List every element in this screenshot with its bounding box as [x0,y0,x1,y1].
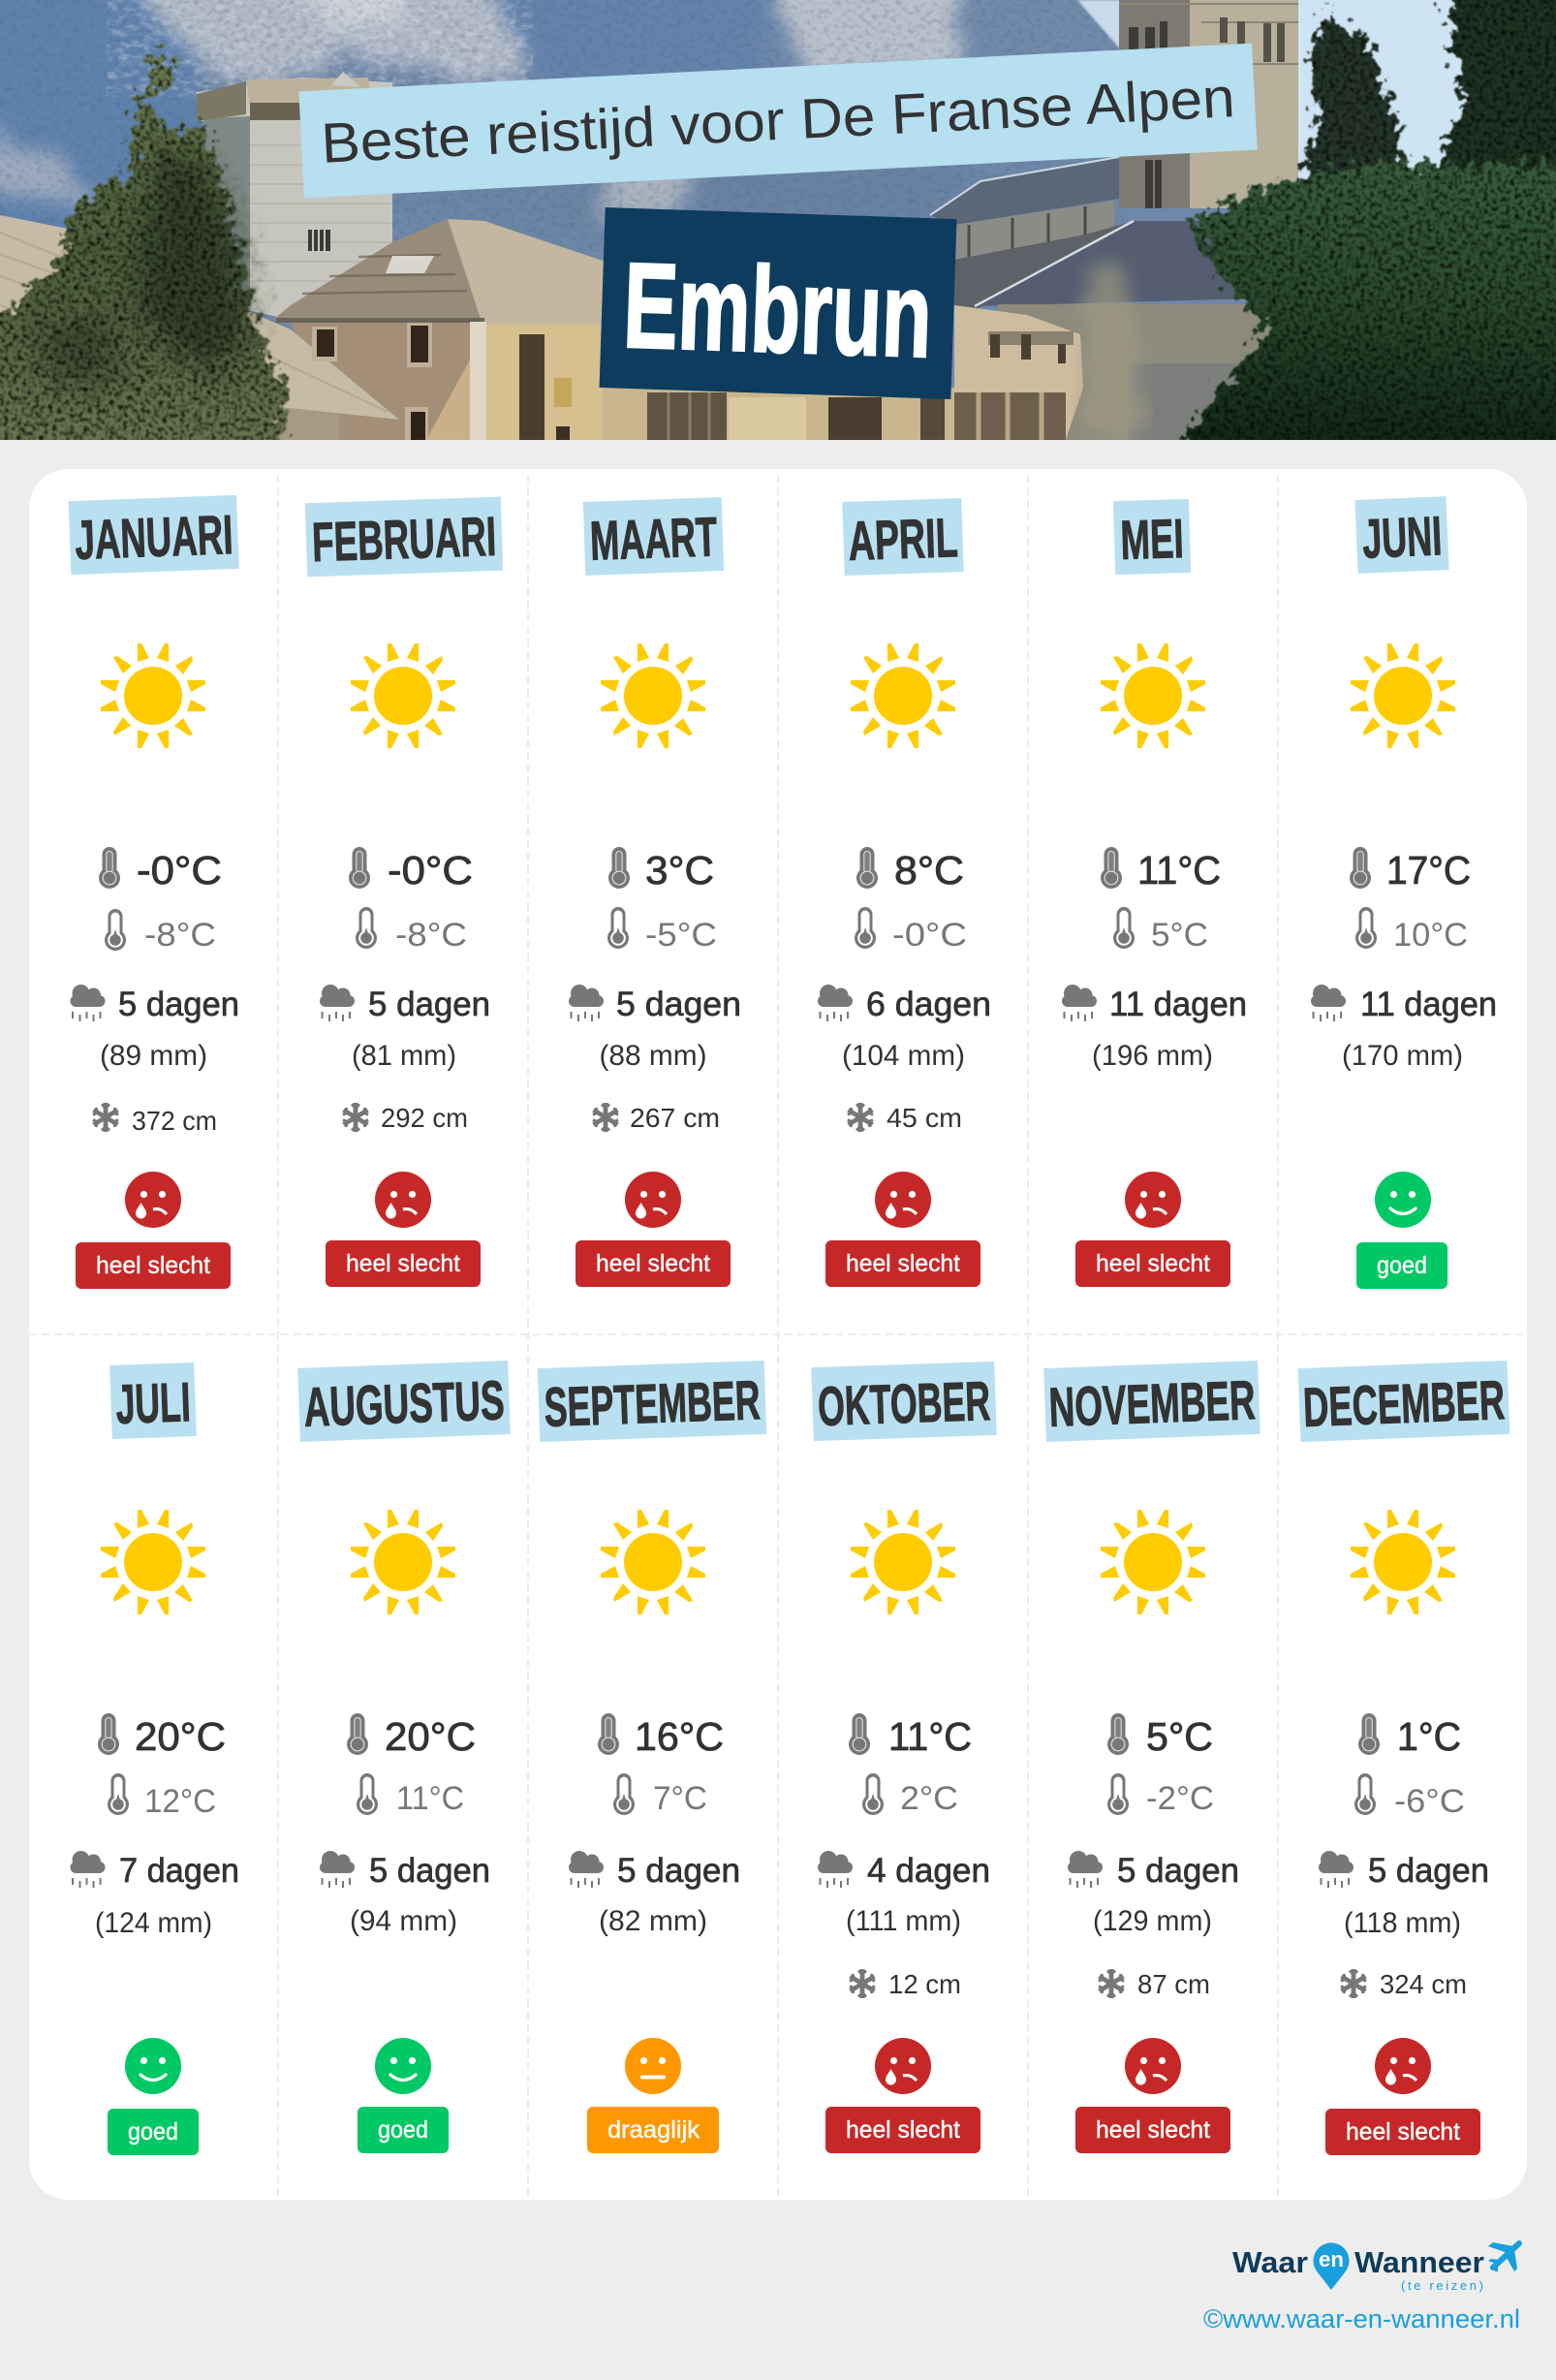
icon: sun [851,643,955,748]
icon: thermometer low [105,909,126,951]
rain days: 5 dagen [617,1852,740,1890]
snowfall: 45 cm [887,1103,962,1133]
rain days: 5 dagen [1368,1852,1489,1890]
icon: rain cloud [320,1851,355,1888]
icon: sad face [125,1172,181,1228]
rain days: 5 dagen [616,986,741,1023]
icon: rain cloud [1311,985,1346,1021]
icon: thermometer low [1113,907,1135,949]
icon: sun [1351,1510,1455,1614]
castle tower [197,78,392,320]
icon: thermometer low [1355,907,1377,949]
month label [583,497,724,576]
icon: thermometer low [855,907,876,949]
icon: thermometer low [356,907,377,949]
icon: airplane [1488,2242,1519,2271]
high temperature: 1°C [1397,1714,1461,1759]
month label [1354,496,1449,574]
rating badge [1325,2109,1480,2155]
icon: sun [601,1510,705,1614]
rain days: 11 dagen [1360,986,1497,1023]
icon: sad face [625,1172,681,1228]
month label [1043,1361,1260,1442]
month label: NOVEMBER [1048,1369,1257,1439]
rating badge [576,1240,731,1287]
panel: maart [569,497,741,1287]
month label: APRIL [848,507,959,573]
birch tree [1080,266,1143,440]
rainfall: (82 mm) [599,1905,707,1937]
rain days: 4 dagen [867,1852,990,1890]
icon: rain cloud [1319,1851,1354,1888]
rating badge: heel slecht [596,1250,710,1277]
church tower [1119,0,1190,208]
icon: rain cloud [70,985,105,1021]
rating badge [326,1240,481,1287]
low temperature: 12°C [144,1783,216,1820]
icon: sad face [875,1172,931,1228]
left tree [0,44,286,455]
rating badge [587,2107,719,2153]
panel: oktober [811,1362,997,2153]
lower facades under the city label [603,388,961,440]
panel: mei [1062,499,1247,1287]
snowfall: 267 cm [630,1103,720,1133]
icon: thermometer high [98,1713,119,1755]
low temperature: 11°C [396,1780,464,1817]
central building roof [273,219,482,320]
rainfall: (89 mm) [100,1040,207,1072]
logo tagline: (te reizen) [1401,2278,1483,2293]
rating badge [825,1240,980,1287]
icon: rain cloud [818,1851,853,1888]
icon: neutral face [625,2038,681,2094]
month label: OKTOBER [817,1370,991,1438]
icon: happy face [125,2038,181,2094]
icon: snowflake [343,1103,368,1132]
snowfall: 372 cm [132,1106,217,1136]
icon: thermometer high [99,847,120,889]
icon: rain cloud [818,985,853,1021]
rainfall: (170 mm) [1342,1040,1463,1072]
icon: sun [851,1510,955,1614]
icon: sun [601,643,705,748]
right tan building roofs [954,305,1083,440]
icon: sun [351,1510,455,1614]
rating badge [1075,2107,1230,2153]
rating badge: heel slecht [1346,2118,1460,2145]
icon: snowflake [850,1969,875,1998]
icon: snowflake [93,1103,118,1132]
header photo: Embrun town with mountains [0,0,1556,465]
high temperature: 17°C [1386,848,1471,892]
central building wall [291,322,475,440]
icon: thermometer high [608,847,630,889]
rating badge: draaglijk [607,2116,700,2144]
icon: sun [101,1510,205,1614]
icon: rain cloud [569,1851,604,1888]
low temperature: 7°C [653,1780,707,1817]
icon: snowflake [848,1103,873,1132]
month label: FEBRUARI [311,506,497,574]
month label [811,1362,997,1441]
icon: happy face [1375,1172,1431,1228]
panel: augustus [297,1361,511,2153]
rating badge [358,2107,449,2153]
logo word: Waar: Waar [1232,2245,1308,2279]
rain days: 11 dagen [1109,986,1247,1023]
rainfall: (88 mm) [599,1040,707,1072]
city name label: Embrun [622,238,934,383]
rating badge [1356,1242,1447,1289]
month label [69,495,239,575]
month label [1113,499,1191,575]
high temperature: 20°C [135,1714,226,1759]
icon: thermometer low [862,1773,884,1815]
icon: rain cloud [1062,985,1097,1021]
panel: november [1043,1361,1260,2153]
left roofs [0,215,399,420]
city name label [600,207,956,399]
high temperature: -0°C [388,848,473,892]
rating badge: heel slecht [346,1250,460,1277]
icon: thermometer low [1107,1773,1129,1815]
icon: rain cloud [70,1851,105,1888]
rainfall: (104 mm) [842,1040,965,1072]
high temperature: 11°C [1137,848,1221,892]
icon: thermometer high [1101,847,1122,889]
panel: juni [1311,496,1497,1289]
month label: JULI [115,1371,192,1436]
icon: thermometer high [849,1713,870,1755]
rainfall: (94 mm) [350,1905,457,1937]
rainfall: (129 mm) [1093,1905,1212,1937]
icon: thermometer low [108,1773,129,1815]
snowfall: 292 cm [381,1103,468,1133]
low temperature: 2°C [900,1780,958,1817]
icon: sun [1351,643,1455,748]
rating badge [76,1242,231,1289]
rating badge: heel slecht [1096,2116,1210,2144]
icon: sun [1101,643,1205,748]
panel: april [818,498,991,1287]
month label [305,497,503,577]
panel: september [538,1361,766,2153]
icon: sad face [875,2038,931,2094]
low temperature: -5°C [645,917,717,954]
icon: thermometer low [607,907,629,949]
logo word: Wanneer: Wanneer [1354,2245,1484,2279]
rain days: 5 dagen [368,986,490,1023]
icon: thermometer high [349,847,370,889]
month label: AUGUSTUS [303,1369,506,1439]
logo: Waar en Wanneer [1232,2242,1519,2293]
rating badge: heel slecht [846,1250,960,1277]
month label: JUNI [1361,505,1443,571]
month label: JANUARI [74,504,233,572]
snowfall: 12 cm [888,1969,961,1999]
icon: thermometer high [1350,847,1371,889]
low temperature: 5°C [1151,917,1208,954]
rating badge: goed [128,2118,178,2145]
icon: sun [351,643,455,748]
icon: snowflake [1341,1969,1366,1998]
sky patches [1077,0,1119,49]
month label: MEI [1120,508,1185,572]
rainfall: (118 mm) [1344,1907,1461,1939]
icon: sun [1101,1510,1205,1614]
title banner: Beste reistijd voor De Franse Alpen [320,66,1236,175]
panel: december [1298,1361,1509,2155]
church roofs and walls [930,157,1119,225]
icon: thermometer low [1354,1773,1376,1815]
icon: thermometer high [347,1713,368,1755]
rating badge [108,2109,199,2155]
icon: rain cloud [569,985,604,1021]
icon: rain cloud [1068,1851,1103,1888]
rain days: 6 dagen [866,986,991,1023]
low temperature: 10°C [1393,917,1468,954]
icon: thermometer high [1358,1713,1380,1755]
icon: thermometer low [357,1773,378,1815]
snowfall: 87 cm [1137,1969,1210,1999]
low temperature: -8°C [144,917,216,954]
rating badge [825,2107,980,2153]
month label [538,1361,766,1442]
rating badge: heel slecht [96,1252,210,1279]
rainfall: (81 mm) [352,1040,456,1072]
high temperature: 11°C [888,1714,972,1759]
logo word: en: en [1319,2247,1344,2271]
rain days: 5 dagen [1117,1852,1239,1890]
rainfall: (196 mm) [1092,1040,1213,1072]
rainfall: (111 mm) [846,1905,961,1937]
icon: sad face [1125,1172,1181,1228]
rating badge: goed [378,2116,428,2144]
panel: juli [70,1362,239,2155]
low temperature: -0°C [892,917,967,954]
rain days: 5 dagen [369,1852,490,1890]
month label: SEPTEMBER [544,1369,762,1439]
icon: sad face [1125,2038,1181,2094]
rainfall: (124 mm) [95,1907,212,1939]
high temperature: 5°C [1146,1714,1213,1759]
month label [842,498,964,576]
month label [109,1362,197,1439]
icon: happy face [375,2038,431,2094]
right tree [1163,0,1556,465]
low temperature: -8°C [395,917,467,954]
website credit: ©www.waar-en-wanneer.nl [1203,2304,1520,2333]
icon: snowflake [1099,1969,1124,1998]
icon: thermometer high [1107,1713,1129,1755]
high temperature: 20°C [385,1714,476,1759]
high temperature: 8°C [894,848,964,892]
icon: sun [101,643,205,748]
icon: thermometer low [613,1773,635,1815]
rain days: 7 dagen [119,1852,239,1890]
high temperature: 3°C [645,848,714,892]
climate table card [29,469,1527,2200]
high temperature: -0°C [137,848,222,892]
icon: rain cloud [320,985,355,1021]
low temperature: -6°C [1394,1783,1465,1820]
icon: sad face [375,1172,431,1228]
month label: MAART [589,506,718,573]
icon: snowflake [593,1103,618,1132]
title banner [298,44,1258,198]
panel: februari [305,497,503,1287]
icon: sad face [1375,2038,1431,2094]
icon: thermometer high [856,847,878,889]
low temperature: -2°C [1146,1780,1214,1817]
rating badge: heel slecht [846,2116,960,2144]
rating badge: heel slecht [1096,1250,1210,1277]
panel: januari [69,495,239,1289]
rating badge [1075,1240,1230,1287]
icon: map pin [1314,2242,1349,2290]
high temperature: 16°C [635,1714,724,1759]
snowfall: 324 cm [1380,1969,1467,1999]
icon: thermometer high [598,1713,619,1755]
rating badge: goed [1377,1252,1427,1279]
month label [297,1361,511,1442]
rain days: 5 dagen [118,986,239,1023]
